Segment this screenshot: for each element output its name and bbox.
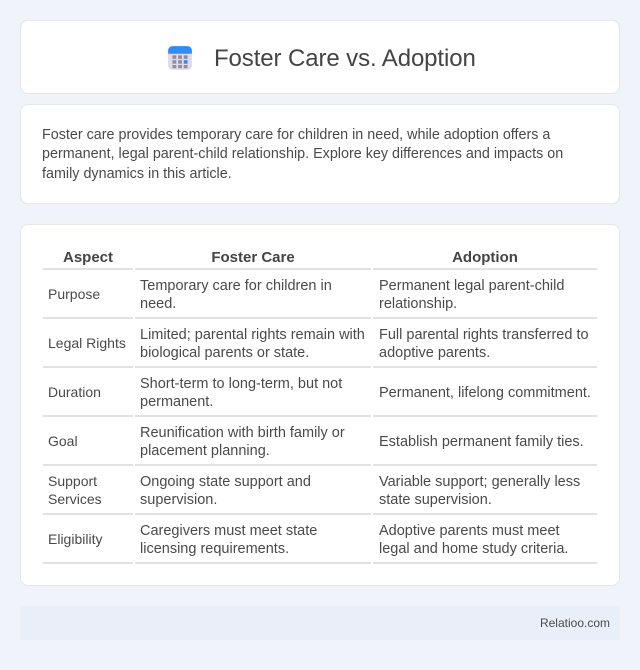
- comparison table: supervision.: [140, 492, 217, 508]
- comparison table: Adoptive parents must meet: [379, 523, 560, 539]
- comparison table: Limited; parental rights remain with: [140, 327, 365, 343]
- comparison table: Permanent legal parent-child: [379, 278, 564, 294]
- title: Foster Care vs. Adoption: [214, 45, 476, 72]
- comparison table: legal and home study criteria.: [379, 541, 568, 557]
- comparison table: Short-term to long-term, but not: [140, 376, 342, 392]
- comparison table: biological parents or state.: [140, 345, 309, 361]
- panel: introduction: [20, 104, 620, 204]
- text: introduction: Foster care provides temporary care for children in need, while adoption offers a: [42, 127, 550, 143]
- comparison table: Caregivers must meet state: [140, 523, 317, 539]
- comparison table: relationship.: [379, 296, 457, 312]
- comparison table: Full parental rights transferred to: [379, 327, 589, 343]
- comparison table: Variable support; generally less: [379, 474, 580, 490]
- comparison table: Reunification with birth family or: [140, 425, 345, 441]
- text: introduction: family dynamics in this article.: [42, 166, 232, 182]
- comparison table: state supervision.: [379, 492, 492, 508]
- panel: title card: [20, 20, 620, 94]
- icon: calendar: [168, 46, 192, 70]
- column header: Adoption: Adoption: [452, 249, 518, 266]
- footer credit: Relatioo.com: [540, 616, 610, 630]
- footer bar: [20, 606, 620, 640]
- comparison table: Temporary care for children in: [140, 278, 332, 294]
- comparison table: need.: [140, 296, 176, 312]
- row: Purpose: Purpose: [48, 286, 100, 302]
- row: Support Services: Support: [48, 473, 97, 489]
- row: Goal: Goal: [48, 433, 78, 449]
- text: introduction: [42, 127, 563, 182]
- comparison table: licensing requirements.: [140, 541, 289, 557]
- row: Duration: Duration: [48, 384, 101, 400]
- panel: comparison table card: [20, 224, 620, 586]
- comparison table: adoptive parents.: [379, 345, 490, 361]
- comparison table: permanent.: [140, 394, 213, 410]
- comparison table: Ongoing state support and: [140, 474, 311, 490]
- comparison table: Permanent, lifelong commitment.: [379, 385, 591, 401]
- row: Support Services: Services: [48, 491, 102, 507]
- column header: Foster Care: Foster Care: [211, 249, 295, 266]
- row: Support Services: [48, 473, 102, 507]
- row: Legal Rights: Legal Rights: [48, 335, 126, 351]
- text: introduction: permanent, legal parent-child relationship. Explore key differences and impacts on: [42, 146, 563, 162]
- column header: Aspect: Aspect: [63, 249, 113, 266]
- comparison table: placement planning.: [140, 443, 270, 459]
- comparison table: Establish permanent family ties.: [379, 434, 584, 450]
- row: Eligibility: Eligibility: [48, 531, 102, 547]
